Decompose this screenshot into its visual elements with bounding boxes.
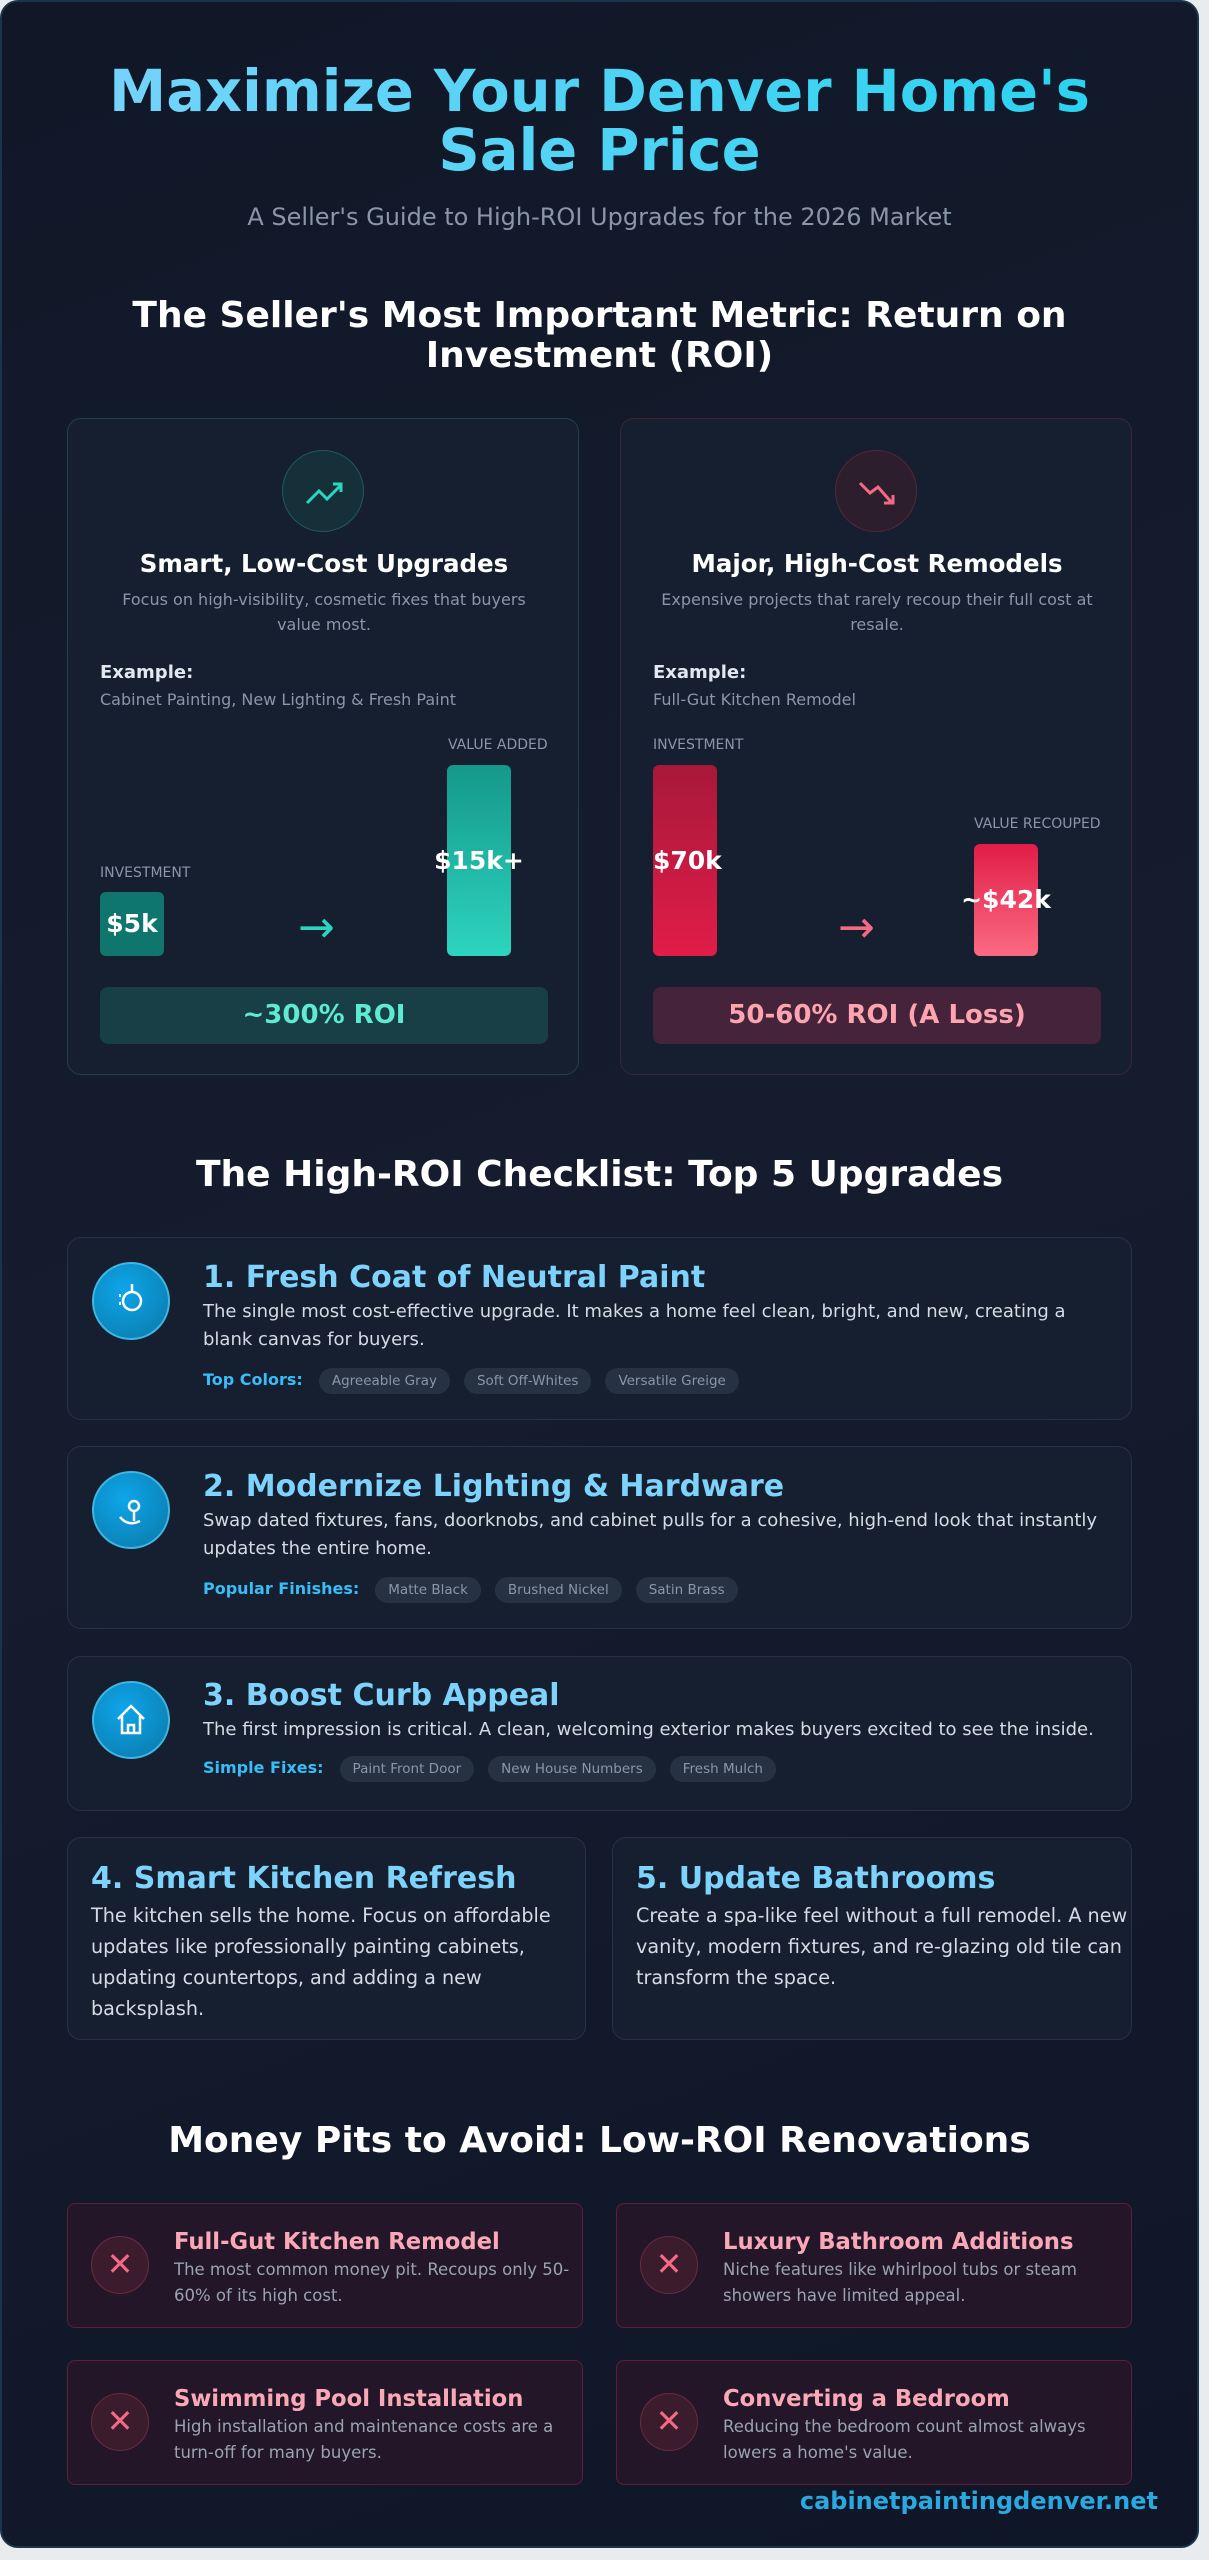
example: Cabinet Painting, New Lighting & Fresh Paint (100, 690, 456, 709)
pit: bedroom (616, 2360, 1132, 2485)
pit: bedroom: Converting a Bedroom (723, 2386, 1010, 2412)
heading: ROI: Investment (ROI) (426, 335, 773, 376)
ROI result: ~300% ROI (243, 1000, 405, 1030)
ROI result: 50-60% ROI (A Loss) (728, 1000, 1026, 1030)
pit: pool: ✕ (107, 2402, 133, 2440)
panel: major remodels (620, 418, 1132, 1075)
item 4: kitchen: 4. Smart Kitchen Refresh (91, 1861, 516, 1896)
chart: investment vs value added (100, 737, 548, 956)
chart: investment vs value added: $15k+ (434, 846, 524, 875)
heading: checklist: The High-ROI Checklist: Top 5 Upgrades (196, 1154, 1003, 1195)
card title: Smart, Low-Cost Upgrades (140, 549, 508, 578)
pit: bedroom: ✕ (656, 2402, 682, 2440)
chart: investment vs value added: → (298, 902, 335, 953)
heading: ROI: The Seller's Most Important Metric: Return on (132, 295, 1067, 336)
pit: luxury bathroom: Luxury Bathroom Additions (723, 2229, 1073, 2255)
panel: smart upgrades (67, 418, 579, 1075)
item 1: paint: Agreeable Gray (332, 1373, 437, 1389)
description: Expensive projects that rarely recoup their full cost at resale. (661, 590, 1093, 634)
item 2: lighting: 2. Modernize Lighting & Hardware (203, 1469, 784, 1504)
chart: investment vs value recouped: INVESTMENT (653, 737, 743, 753)
heading: money pits: Money Pits to Avoid: Low-ROI Renovations (168, 2120, 1031, 2161)
item 3: curb appeal: Simple Fixes: (203, 1758, 324, 1777)
item 5: bathrooms: Create a spa-like feel without a full remodel. A new vanity, modern fixtures, and re-glazing old tile can transform the space. (636, 1904, 1127, 1989)
item 1: paint: Versatile Greige (618, 1373, 726, 1389)
chart: investment vs value recouped: VALUE RECOUPED (974, 816, 1101, 832)
item 2: lighting: Brushed Nickel (508, 1582, 609, 1598)
icon: light fixture (92, 1471, 170, 1549)
item 2: lighting: Satin Brass (649, 1582, 725, 1598)
item 1: paint: Top Colors: (203, 1370, 303, 1389)
pit: luxury bathroom: Niche features like whirlpool tubs or steam showers have limited appeal. (723, 2260, 1077, 2305)
icon: trend up (282, 450, 364, 532)
ROI result (100, 987, 548, 1044)
pit: pool (67, 2360, 583, 2485)
pit: bedroom: Reducing the bedroom count almost always lowers a home's value. (723, 2417, 1086, 2462)
item 3: curb appeal: 3. Boost Curb Appeal (203, 1678, 560, 1713)
item 2: lighting: Popular Finishes: (203, 1579, 359, 1598)
chart: investment vs value recouped (653, 737, 1101, 956)
icon: trend down (835, 450, 917, 532)
item 5: bathrooms (612, 1837, 1132, 2040)
item 3: curb appeal: New House Numbers (501, 1761, 643, 1777)
icon: paint brush (92, 1262, 170, 1340)
title: Maximize Your Denver Home's (109, 58, 1090, 125)
item 3: curb appeal: The first impression is critical. A clean, welcoming exterior makes buyers excited to see the inside. (203, 1719, 1094, 1740)
pit: luxury bathroom: ✕ (656, 2245, 682, 2283)
icon: house (92, 1681, 170, 1759)
example: Example: (100, 662, 193, 683)
example: Full-Gut Kitchen Remodel (653, 690, 856, 709)
chart: investment vs value added: $5k (106, 909, 158, 938)
item 3: curb appeal: Fresh Mulch (683, 1761, 763, 1777)
chart: investment vs value added: INVESTMENT (100, 865, 190, 881)
item 1: paint: 1. Fresh Coat of Neutral Paint (203, 1260, 705, 1295)
title (0, 62, 1199, 180)
pit: kitchen remodel: ✕ (107, 2245, 133, 2283)
pit: kitchen remodel (67, 2203, 583, 2328)
item 4: kitchen (67, 1837, 586, 2040)
card title: Major, High-Cost Remodels (691, 549, 1063, 578)
chart: investment vs value recouped: ~$42k (961, 885, 1051, 914)
example: Example: (653, 662, 746, 683)
description: Focus on high-visibility, cosmetic fixes that buyers value most. (122, 590, 526, 634)
pit: pool: Swimming Pool Installation (174, 2386, 523, 2412)
chart: investment vs value recouped: $70k (653, 846, 722, 875)
pit: pool: High installation and maintenance costs are a turn-off for many buyers. (174, 2417, 553, 2462)
item 4: kitchen: The kitchen sells the home. Focus on affordable updates like professionally painting cabinets, updating countertops, and adding a new backsplash. (91, 1904, 551, 2020)
item 1: paint (67, 1237, 1132, 1420)
item 3: curb appeal: Paint Front Door (353, 1761, 461, 1777)
title: Sale Price (438, 117, 761, 184)
item 2: lighting (67, 1446, 1132, 1629)
footer url: cabinetpaintingdenver.net (800, 2487, 1158, 2515)
example (100, 662, 456, 709)
item 3: curb appeal (67, 1656, 1132, 1811)
pit: kitchen remodel: The most common money pit. Recoups only 50-60% of its high cost. (174, 2260, 569, 2305)
ROI result (653, 987, 1101, 1044)
heading: ROI (132, 295, 1067, 376)
chart: investment vs value added: VALUE ADDED (448, 737, 548, 753)
pit: luxury bathroom (616, 2203, 1132, 2328)
item 5: bathrooms: 5. Update Bathrooms (636, 1861, 995, 1896)
pit: kitchen remodel: Full-Gut Kitchen Remodel (174, 2229, 500, 2255)
item 2: lighting: Swap dated fixtures, fans, doorknobs, and cabinet pulls for a cohesive, high-end look that instantly updates the entire home. (203, 1510, 1097, 1559)
subtitle: A Seller's Guide to High-ROI Upgrades for the 2026 Market (247, 203, 952, 231)
item 1: paint: Soft Off-Whites (477, 1373, 578, 1389)
item 2: lighting: Matte Black (388, 1582, 468, 1598)
item 1: paint: The single most cost-effective upgrade. It makes a home feel clean, bright, and new, creating a blank canvas for buyers. (203, 1301, 1066, 1350)
chart: investment vs value recouped: → (838, 902, 875, 953)
example (653, 662, 856, 709)
